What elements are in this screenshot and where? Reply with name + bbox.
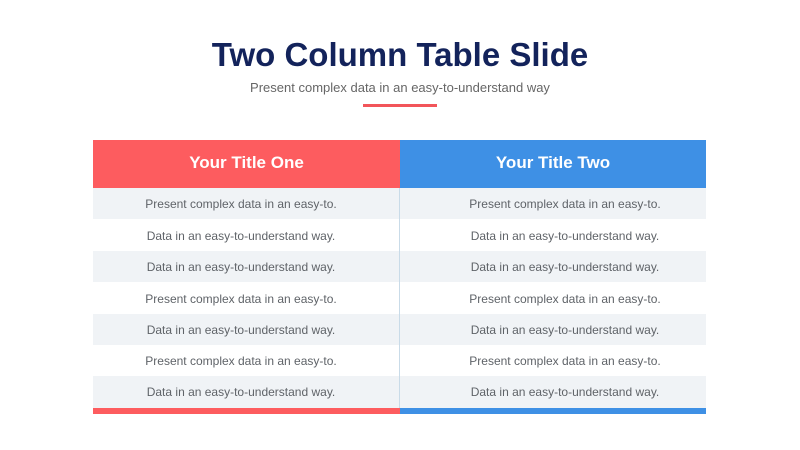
row 5: Data in an easy-to-understand way. [471, 323, 659, 337]
row 6: Present complex data in an easy-to. [469, 354, 661, 368]
row 2: Data in an easy-to-understand way. [147, 229, 335, 243]
row 3 [93, 251, 706, 282]
header: column one: Your Title One [189, 153, 304, 172]
row 7 [93, 376, 706, 408]
row 1: Present complex data in an easy-to. [145, 197, 337, 211]
bottom bar: column one [93, 408, 400, 414]
row 4: Present complex data in an easy-to. [145, 292, 337, 306]
header: column one [93, 140, 400, 188]
header: column two: Your Title Two [496, 153, 610, 172]
row 6 [145, 354, 661, 368]
bottom bar: column two [400, 408, 706, 414]
title: Two Column Table Slide [212, 36, 588, 73]
row 6: Present complex data in an easy-to. [145, 354, 337, 368]
subtitle: Present complex data in an easy-to-understand way [250, 80, 550, 95]
row 1: Present complex data in an easy-to. [469, 197, 661, 211]
row 3: Data in an easy-to-understand way. [147, 260, 335, 274]
row 7: Data in an easy-to-understand way. [471, 385, 659, 399]
row 5: Data in an easy-to-understand way. [147, 323, 335, 337]
row 2 [147, 229, 659, 243]
row 4 [145, 292, 661, 306]
row 1 [93, 188, 706, 219]
accent underline [363, 104, 437, 107]
row 4: Present complex data in an easy-to. [469, 292, 661, 306]
row 7: Data in an easy-to-understand way. [147, 385, 335, 399]
row 2: Data in an easy-to-understand way. [471, 229, 659, 243]
row 3: Data in an easy-to-understand way. [471, 260, 659, 274]
header: column two [400, 140, 706, 188]
row 5 [93, 314, 706, 345]
